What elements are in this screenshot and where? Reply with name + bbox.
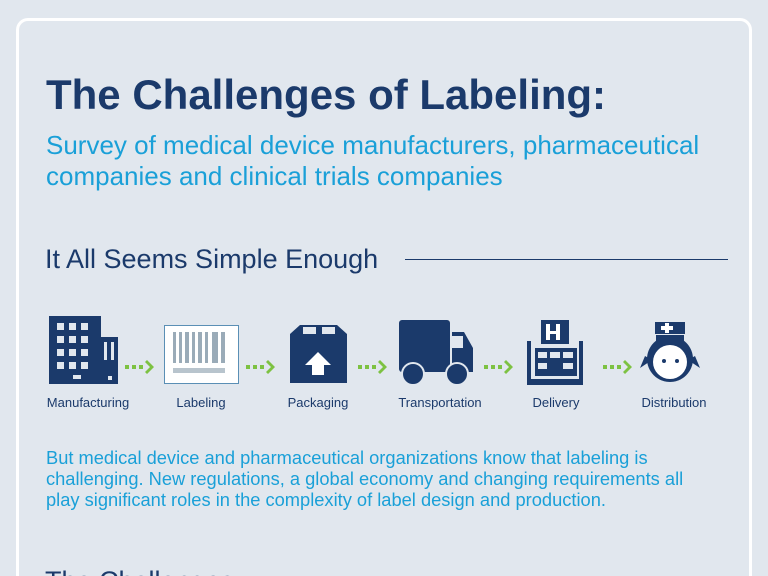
label: labeling: Labeling (176, 395, 226, 410)
icon: nurse (640, 322, 700, 382)
arrows (125, 360, 632, 374)
label: manufacturing: Manufacturing (47, 395, 129, 410)
divider line (405, 259, 728, 260)
icon: barcode (164, 326, 238, 384)
section heading: It All Seems Simple Enough (45, 244, 378, 274)
label: distribution: Distribution (641, 395, 707, 410)
subtitle: Survey of medical device manufacturers, pharmaceutical companies and clinical trials companies (46, 130, 699, 191)
icon: truck (399, 320, 473, 385)
icon: hospital (527, 320, 583, 385)
icon: factory (49, 316, 118, 384)
label: transportation: Transportation (398, 395, 482, 410)
process flow (47, 316, 707, 410)
body text: But medical device and pharmaceutical organizations know that labeling is challenging. New regulations, a global economy and changing requirements all play significant roles in the complexity of label design and production. (46, 447, 683, 510)
icon: package (290, 325, 347, 383)
label: packaging: Packaging (288, 395, 348, 410)
title: The Challenges of Labeling: (46, 71, 606, 118)
label: delivery: Delivery (533, 395, 579, 410)
